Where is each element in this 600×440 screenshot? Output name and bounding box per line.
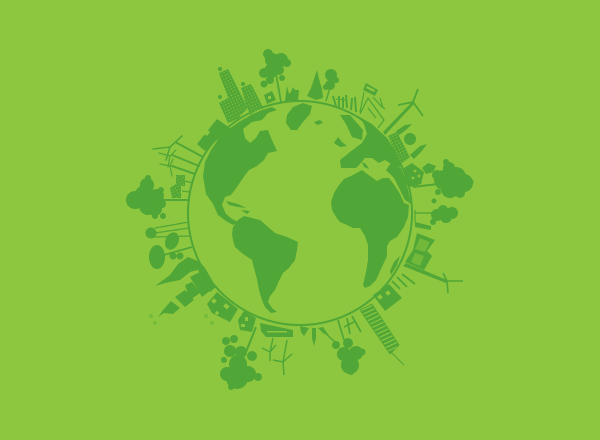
- bushy trees, left: [149, 230, 192, 269]
- continent: South America: [232, 216, 298, 313]
- continent: Europe and Asia: [340, 116, 401, 168]
- pine tree, left: [155, 257, 205, 286]
- cranes, lower right: [392, 274, 415, 289]
- wind turbine, upper right: [383, 89, 423, 135]
- continent: Greenland: [286, 103, 312, 130]
- continent: Africa: [331, 170, 409, 288]
- continent: North America: [203, 107, 277, 225]
- house with round windows: [404, 163, 436, 187]
- lamp and railings: [146, 222, 191, 238]
- tree: small right: [430, 205, 458, 225]
- continent: Scandinavia: [340, 115, 363, 140]
- wind turbines, bottom: [262, 338, 292, 375]
- people and railings, bottom: [300, 316, 361, 346]
- small square house: [264, 91, 276, 104]
- continent: Caribbean islands: [226, 201, 250, 214]
- striped skyscraper: [360, 304, 404, 365]
- people, top: [333, 95, 356, 112]
- vehicles, right: [415, 210, 432, 230]
- tree: bottom: [220, 327, 262, 390]
- small houses, lower right: [373, 284, 402, 311]
- wind turbines, left: [153, 136, 203, 176]
- faint figures, lower left: [149, 314, 214, 325]
- tree: large right: [413, 159, 474, 204]
- tree: lower right: [322, 330, 366, 375]
- globe: [188, 101, 412, 325]
- tree: tall top: [259, 49, 291, 102]
- small houses, lower left: [207, 292, 256, 332]
- continent: Madagascar: [390, 256, 400, 275]
- wind turbine, lower right: [403, 263, 463, 293]
- dotted block building: [170, 175, 193, 198]
- bushes, top: [285, 86, 299, 101]
- scaffold structure: [360, 97, 385, 128]
- tower blocks, lower left: [158, 268, 216, 317]
- tree: pine top: [307, 70, 323, 100]
- globe ring: [188, 101, 412, 325]
- factory: [388, 124, 427, 164]
- continent: Iceland: [314, 120, 323, 125]
- billboard: [360, 83, 378, 112]
- city silhouettes ring: [126, 49, 474, 390]
- tree: far left: [126, 175, 190, 219]
- bus: [260, 323, 293, 337]
- continent: Arabia: [386, 163, 411, 204]
- tall office buildings: [218, 67, 263, 123]
- continent: British Isles: [334, 137, 347, 147]
- truck: [197, 119, 230, 151]
- continent: Mediterranean islands: [362, 162, 369, 169]
- tree: round top: [323, 69, 339, 101]
- paired buildings, right: [405, 233, 435, 270]
